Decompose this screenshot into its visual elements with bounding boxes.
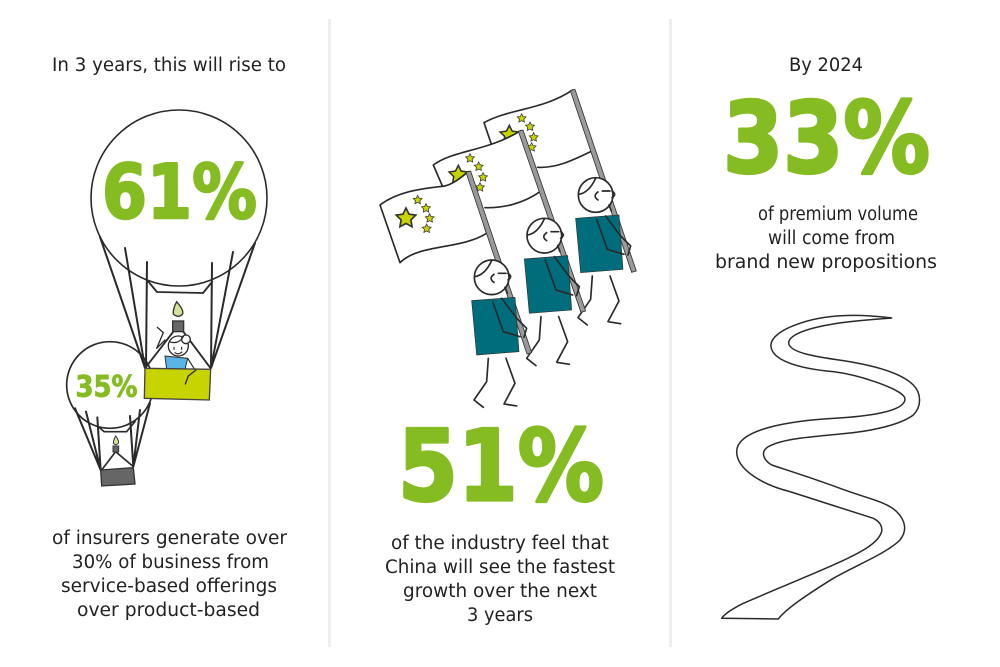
text block: propositions: of premium volume [758,204,918,225]
text block: China [385,533,615,626]
stat: 61%: 61% [102,148,257,236]
divider: left [328,19,331,647]
icon: winding road [722,315,920,619]
text block: China: of the industry feel that [391,533,609,554]
text block: propositions: brand new propositions [715,252,937,273]
text block: propositions [715,204,937,273]
flag: back [484,89,636,272]
stat: 35%: 35% [76,370,138,404]
text block: China: growth over the next [403,581,597,602]
text block: China: China will see the fastest [385,557,615,578]
panel: service-based offerings [52,55,287,621]
flag: front [380,171,532,354]
divider: right [669,19,672,647]
text block: China: 3 years [467,605,533,626]
panel: China growth [380,89,636,626]
person: middle [524,218,579,366]
text block: insurers: 30% of business from [72,552,269,573]
person: front [472,260,527,407]
heading: by 2024: By 2024 [789,55,863,76]
text block: insurers: of insurers generate over [52,528,287,549]
heading: in 3 years: In 3 years, this will rise to [52,55,286,76]
icon: small balloon [67,342,153,486]
stat: 51%: 51% [398,410,604,524]
text block: insurers: service-based offerings [61,576,277,597]
stat: 33%: 33% [723,82,930,196]
text block: insurers: over product-based [77,600,260,621]
icon: three flag bearers [380,89,636,407]
icon: big balloon [91,110,267,400]
text block: insurers [52,528,287,621]
panel: premium volume [715,55,937,619]
person: back [576,178,631,325]
text block: propositions: will come from [768,228,895,249]
flag: middle [433,130,586,312]
